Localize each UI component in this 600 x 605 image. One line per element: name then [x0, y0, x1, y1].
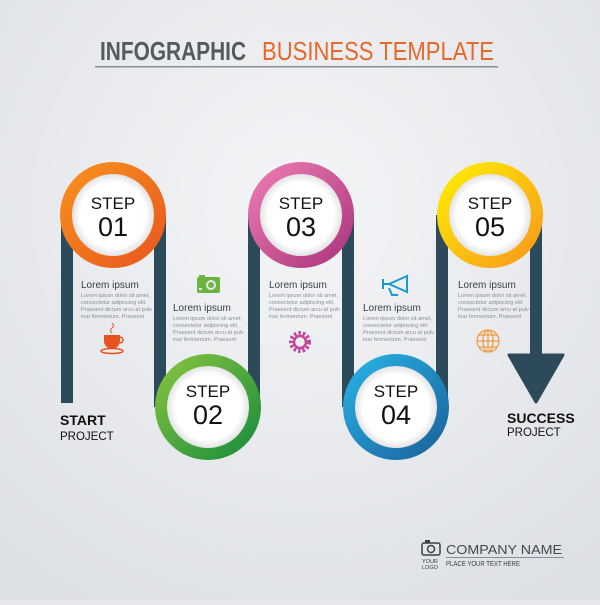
step 05 circle: STEP — [468, 194, 512, 213]
step 04 circle — [343, 354, 449, 460]
arrow — [509, 355, 563, 402]
company logo — [422, 540, 564, 571]
icon: globe — [477, 330, 499, 352]
text block 1: consectetur adipiscing elit. — [81, 300, 147, 306]
text block 5: inar fermentum. Praesent — [458, 314, 522, 320]
text block 2: Praesent dictum arcu at pulv — [173, 330, 244, 336]
start label: PROJECT — [60, 431, 114, 443]
company logo: COMPANY NAME — [446, 542, 562, 557]
step 04 circle: STEP — [374, 382, 418, 401]
text block 2: consectetur adipiscing elit. — [173, 323, 239, 329]
text block 1: Praesent dictum arcu at pulv — [81, 307, 152, 313]
company logo: LOGO — [422, 565, 439, 571]
company logo: PLACE YOUR TEXT HERE — [446, 559, 520, 568]
company logo: YOUR — [422, 559, 438, 565]
step 03 circle: STEP — [279, 194, 323, 213]
text block 4: inar fermentum. Praesent — [363, 337, 427, 343]
text block 3: Lorem ipsum dolor sit amet, — [269, 293, 338, 299]
step 01 circle: 01 — [98, 212, 128, 242]
text block 1: inar fermentum. Praesent — [81, 314, 145, 320]
text block 1: Lorem ipsum — [81, 280, 139, 291]
text block 2 — [173, 303, 244, 343]
text block 3: consectetur adipiscing elit. — [269, 300, 335, 306]
text block 4: Praesent dictum arcu at pulv — [363, 330, 434, 336]
success label — [507, 410, 575, 439]
text block 5: Lorem ipsum dolor sit amet, — [458, 293, 527, 299]
text block 2: Lorem ipsum — [173, 303, 231, 314]
text block 4: consectetur adipiscing elit. — [363, 323, 429, 329]
step 01 circle — [60, 162, 166, 268]
title: INFOGRAPHIC — [100, 36, 246, 66]
icon: camera — [197, 275, 220, 293]
text block 3: Praesent dictum arcu at pulv — [269, 307, 340, 313]
success label: PROJECT — [507, 427, 561, 439]
connector path — [61, 215, 542, 407]
text block 4 — [363, 303, 434, 343]
text block 5: consectetur adipiscing elit. — [458, 300, 524, 306]
text block 5 — [458, 280, 529, 320]
icon: coffee cup — [101, 323, 123, 354]
step 05 circle: 05 — [475, 212, 505, 242]
text block 1: Lorem ipsum dolor sit amet, — [81, 293, 150, 299]
icon: gear — [291, 333, 309, 351]
text block 4: Lorem ipsum dolor sit amet, — [363, 316, 432, 322]
title — [95, 36, 498, 68]
step 04 circle: 04 — [381, 400, 411, 430]
text block 2: Lorem ipsum dolor sit amet, — [173, 316, 242, 322]
step 03 circle: 03 — [286, 212, 316, 242]
text block 5: Praesent dictum arcu at pulv — [458, 307, 529, 313]
success label: SUCCESS — [507, 410, 575, 426]
step 02 circle: 02 — [193, 400, 223, 430]
title: BUSINESS TEMPLATE — [262, 36, 494, 66]
text block 5: Lorem ipsum — [458, 280, 516, 291]
text block 3: inar fermentum. Praesent — [269, 314, 333, 320]
step 01 circle: STEP — [91, 194, 135, 213]
start label — [60, 412, 114, 443]
text block 1 — [81, 280, 152, 320]
step 05 circle — [437, 162, 543, 268]
icon: megaphone — [383, 276, 407, 295]
text block 4: Lorem ipsum — [363, 303, 421, 314]
step 02 circle: STEP — [186, 382, 230, 401]
step 03 circle — [248, 162, 354, 268]
text block 3 — [269, 280, 340, 320]
start label: START — [60, 412, 106, 428]
step 02 circle — [155, 354, 261, 460]
text block 2: inar fermentum. Praesent — [173, 337, 237, 343]
text block 3: Lorem ipsum — [269, 280, 327, 291]
